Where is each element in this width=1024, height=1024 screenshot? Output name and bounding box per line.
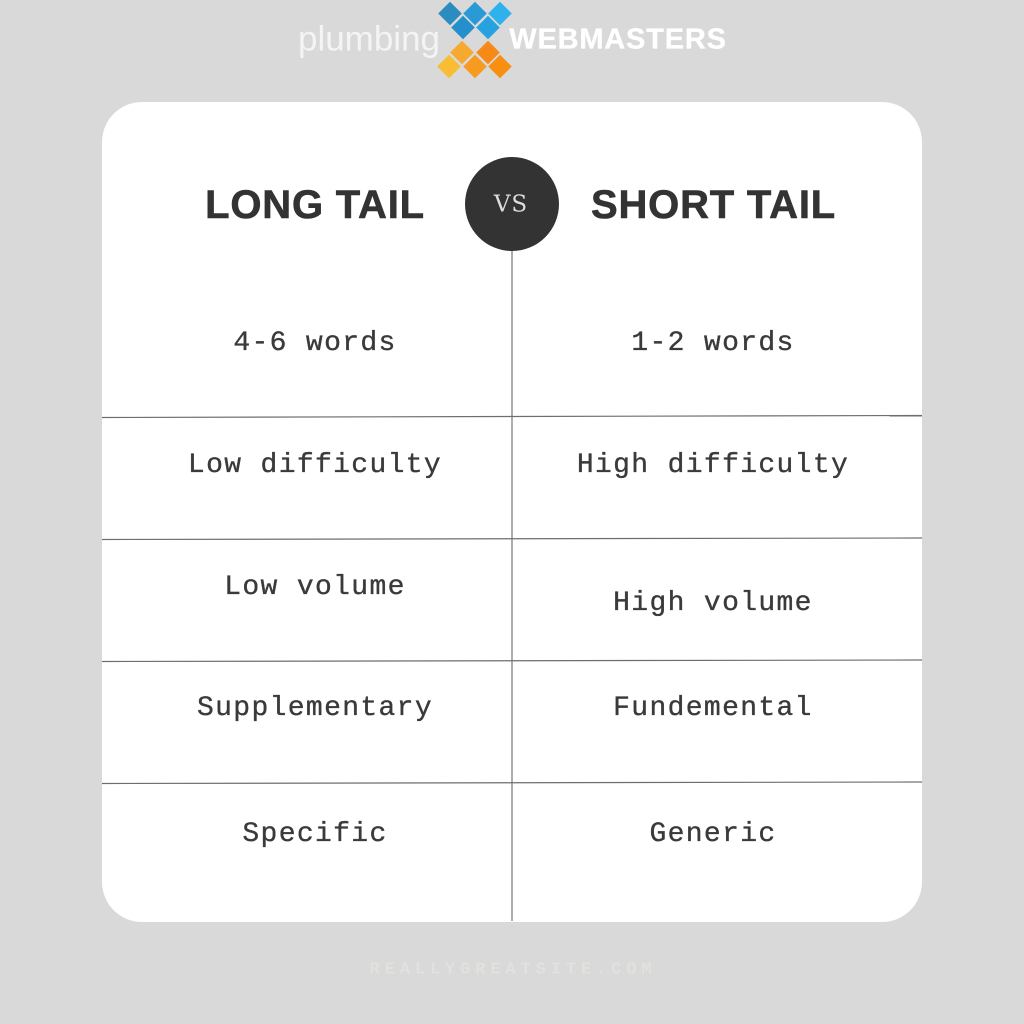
row 2 left: Low difficulty [188, 450, 442, 481]
logo word: WEBMASTERS: WEBMASTERS [509, 24, 727, 56]
row 3 left: Low volume [224, 572, 406, 603]
vs label: VS [494, 191, 528, 217]
logo word: plumbing: plumbing [298, 20, 440, 58]
heading: short tail: SHORT TAIL [591, 183, 836, 227]
row 3 right: High volume [613, 588, 813, 619]
row 1 left: 4-6 words [233, 328, 397, 359]
footer website: REALLYGREATSITE.COM [370, 960, 656, 980]
vs badge [465, 157, 559, 251]
row 2 right: High difficulty [577, 450, 849, 481]
logo mark: diamonds [437, 2, 512, 78]
row 5 left: Specific [242, 819, 388, 850]
row 4 right: Fundemental [613, 693, 813, 724]
row 4 left: Supplementary [197, 693, 433, 724]
row 5 right: Generic [649, 819, 777, 850]
panel: comparison card [102, 102, 922, 922]
logo [298, 2, 727, 78]
heading: long tail: LONG TAIL [205, 183, 425, 227]
row 1 right: 1-2 words [631, 328, 795, 359]
